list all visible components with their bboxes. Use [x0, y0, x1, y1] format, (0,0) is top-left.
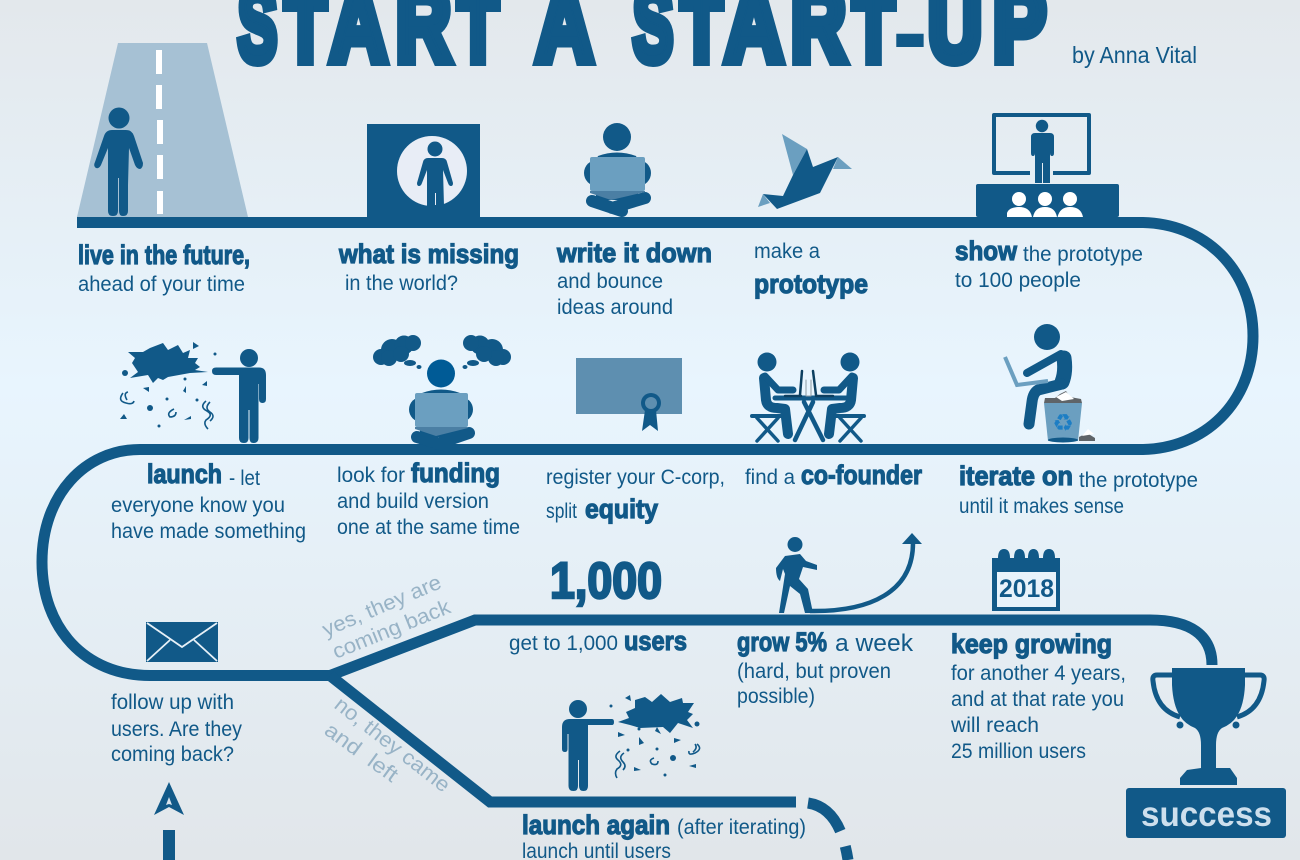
icon: road with person — [77, 43, 248, 217]
text: write it down: write it down — [556, 238, 712, 268]
text: yes branch label — [319, 571, 454, 664]
text: look for funding: and build version — [337, 490, 489, 513]
text: live in the future — [78, 240, 250, 296]
text: get to 1,000 users — [509, 626, 687, 656]
big number 1,000: 1,000 — [550, 552, 662, 609]
text: show the prototype: show — [955, 236, 1018, 266]
text: launch again: (after iterating) — [677, 816, 806, 839]
text: follow up — [111, 691, 242, 766]
text: keep growing: will reach — [950, 714, 1039, 737]
text: get to 1,000 users: users — [624, 626, 687, 656]
text: no branch label: and left — [320, 718, 402, 787]
success badge: success — [1141, 795, 1272, 834]
icon: co-founders at table — [752, 352, 864, 441]
text: find a co-founder — [745, 460, 922, 490]
text: what is missing: in the world? — [345, 272, 458, 295]
text: register C-corp — [546, 466, 725, 524]
text: yes branch label: yes, they are — [319, 571, 445, 642]
icon: person in missing square — [367, 124, 480, 218]
text: keep growing: keep growing — [951, 629, 1112, 659]
text: grow 5%: (hard, but proven — [737, 660, 891, 683]
text: live in the future: live in the future, — [78, 240, 250, 270]
icon: prototype presentation — [976, 115, 1119, 217]
text: write it down — [556, 238, 712, 319]
text: grow 5%: possible) — [737, 685, 815, 708]
text: look for funding: funding — [411, 458, 500, 488]
icon: walking person with growth arrow — [776, 533, 922, 613]
text: launch: launch — [147, 459, 222, 489]
icon: iterate person with recycle bin — [1005, 324, 1095, 442]
text: no branch label: no, they came — [330, 693, 454, 797]
icon: trophy — [1153, 668, 1264, 785]
success badge — [1126, 788, 1286, 838]
icon: up arrow — [154, 782, 184, 815]
text: live in the future: ahead of your time — [78, 273, 245, 296]
icon: launch again person with blast — [562, 694, 700, 791]
text: iterate on the prototype: iterate on — [959, 461, 1073, 491]
text: look for funding — [337, 458, 520, 539]
text: launch: have made something — [111, 520, 306, 543]
icon: envelope — [146, 622, 218, 662]
text: make a prototype — [754, 240, 868, 299]
text: iterate on the prototype — [959, 461, 1198, 518]
icon: origami bird — [758, 134, 852, 209]
text: find a co-founder: find a — [745, 466, 795, 489]
icon: funding person with clouds — [373, 335, 511, 446]
text: make a prototype: make a — [754, 240, 820, 263]
text: register C-corp: equity — [585, 494, 658, 524]
text: look for funding: look for — [337, 464, 405, 487]
icon: calendar 2018: 2018 — [999, 575, 1054, 603]
text: launch — [111, 459, 306, 543]
text: iterate on the prototype: until it makes sense — [959, 495, 1124, 518]
text: write it down: and bounce — [557, 270, 663, 293]
road path — [42, 222, 1253, 860]
text: launch: everyone know you — [111, 494, 285, 517]
text: launch: - let — [229, 467, 260, 490]
icon: launch person with blast — [120, 342, 266, 443]
text: register C-corp: split — [546, 500, 577, 523]
icon: calendar 2018 — [992, 549, 1060, 611]
icon: iterate person with recycle bin: ♻ — [1052, 409, 1074, 437]
text: grow 5%: grow 5% — [737, 627, 827, 657]
text: yes branch label: coming back — [329, 595, 454, 664]
text: follow up: users. Are they — [111, 718, 242, 741]
title — [238, 0, 1046, 84]
text: keep growing — [950, 629, 1126, 763]
text: show the prototype: the prototype — [1023, 243, 1143, 266]
text: keep growing: and at that rate you — [951, 688, 1124, 711]
text: make a prototype: prototype — [754, 269, 868, 299]
text: show the prototype: to 100 people — [955, 269, 1081, 292]
text: register C-corp: register your C-corp, — [546, 466, 725, 489]
text: find a co-founder: co-founder — [801, 460, 922, 490]
text: get to 1,000 users: get to 1,000 — [509, 632, 618, 655]
icon: certificate — [576, 358, 682, 431]
text: what is missing — [338, 239, 519, 295]
text: keep growing: 25 million users — [951, 740, 1086, 763]
text: keep growing: for another 4 years, — [951, 662, 1126, 685]
text: follow up: coming back? — [111, 743, 234, 766]
icon: writer with laptop — [584, 123, 651, 211]
text: follow up: follow up with — [111, 691, 234, 714]
text: launch again — [522, 810, 806, 860]
text: grow 5%: a week — [835, 630, 914, 657]
byline: by Anna Vital — [1072, 42, 1197, 68]
text: launch again: launch again — [522, 810, 670, 840]
text: show the prototype — [955, 236, 1143, 292]
text: what is missing: what is missing — [338, 239, 519, 269]
text: iterate on the prototype: the prototype — [1079, 469, 1198, 492]
text: write it down: ideas around — [557, 296, 673, 319]
text: grow 5% — [737, 627, 914, 708]
text: look for funding: one at the same time — [337, 516, 520, 539]
